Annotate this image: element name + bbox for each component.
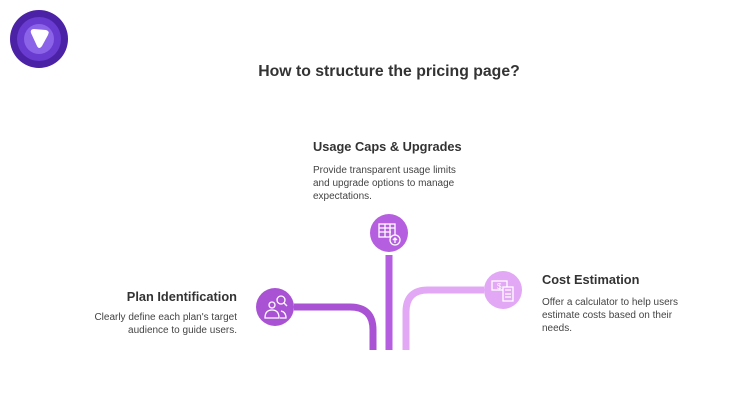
text: cost estimation: Offer a calculator to help users estimate costs based on their needs. — [542, 297, 678, 334]
text: usage caps: Provide transparent usage limits and upgrade options to manage expectations. — [313, 165, 456, 202]
text: plan identification: Plan Identification — [127, 289, 237, 304]
branch: cost estimation: $ — [497, 282, 502, 291]
text: plan identification: Clearly define each plan's target audience to guide users. — [94, 312, 237, 336]
branch: usage caps — [370, 214, 408, 350]
title: How to structure the pricing page? — [258, 63, 520, 80]
text: usage caps — [313, 139, 462, 202]
text: usage caps: Usage Caps & Upgrades — [313, 139, 462, 154]
branch: cost estimation — [406, 271, 522, 350]
text: cost estimation: Cost Estimation — [542, 272, 639, 287]
logo — [10, 10, 68, 68]
text: cost estimation — [542, 272, 678, 334]
branch: plan identification — [256, 288, 373, 350]
text: plan identification — [94, 289, 237, 336]
